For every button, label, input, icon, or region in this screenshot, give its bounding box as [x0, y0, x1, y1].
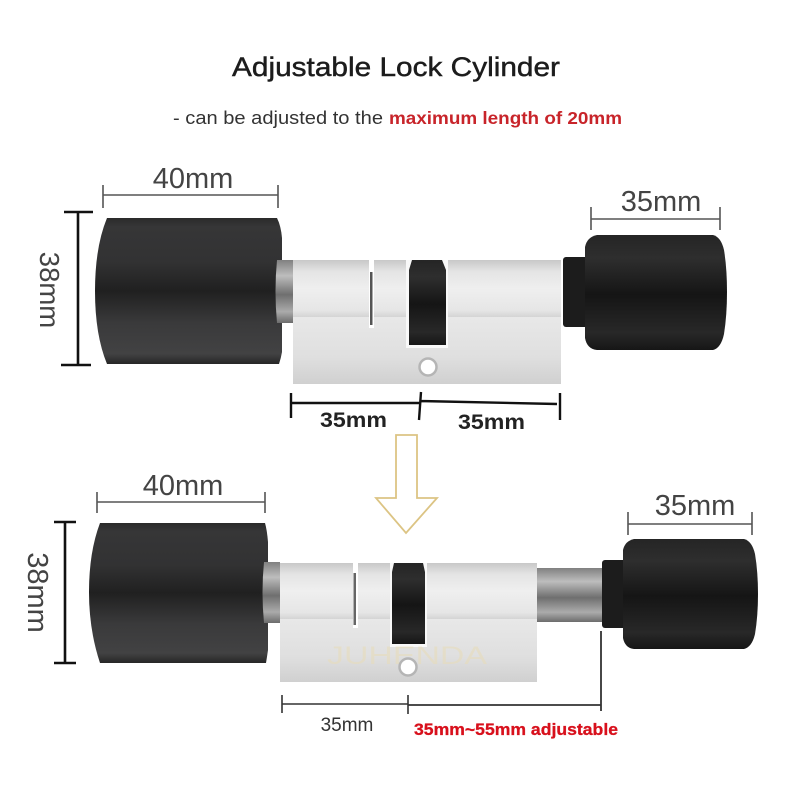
dimension: top 40mm: 40mm [153, 163, 233, 195]
top right collar [563, 257, 593, 327]
dimension: bottom 40mm: 40mm [143, 470, 223, 502]
top left knob [95, 218, 282, 364]
dimension: top body 35mm left [291, 393, 420, 432]
subtitle [173, 108, 622, 128]
dimension: top body 35mm right: 35mm [458, 411, 525, 434]
dimension: bottom 35mm knob [628, 490, 752, 535]
top lock cylinder assembly [95, 218, 727, 384]
arrow pointing down [376, 435, 437, 533]
dimension: bottom 38mm [21, 522, 76, 663]
top screw hole [420, 358, 436, 376]
title: Adjustable Lock Cylinder [232, 52, 560, 82]
bottom right knob [623, 539, 758, 649]
dimension: adjustable range: 35mm~55mm adjustable [414, 720, 618, 739]
bottom cylinder body [280, 563, 537, 682]
extended rod [537, 568, 605, 622]
dimension: top 35mm knob [591, 186, 720, 230]
dimension: top 40mm [103, 163, 278, 208]
dimension: top body 35mm right [419, 392, 560, 434]
top cylinder body [293, 260, 561, 384]
dimension: bottom body 35mm: 35mm [321, 715, 373, 736]
dimension: top 38mm: 38mm [34, 252, 65, 328]
dimension: bottom 40mm [97, 470, 265, 513]
watermark: JUHENDA [327, 642, 487, 670]
dimension: top 35mm knob: 35mm [621, 186, 701, 218]
bottom screw hole [400, 658, 416, 676]
bottom lock cylinder assembly [89, 523, 758, 682]
dimension: bottom 38mm: 38mm [21, 552, 53, 633]
bottom left knob [89, 523, 268, 663]
dimension: bottom body 35mm [282, 695, 408, 736]
dimension: adjustable range [408, 631, 618, 739]
dimension: top body 35mm left: 35mm [320, 409, 387, 432]
top left collar [276, 260, 293, 323]
bottom right collar [602, 560, 630, 628]
bottom left collar [262, 562, 280, 623]
dimension: top 38mm [34, 212, 93, 365]
dimension: bottom 35mm knob: 35mm [655, 490, 735, 522]
subtitle: - can be adjusted to the [173, 108, 383, 128]
top right knob [585, 235, 727, 350]
subtitle: maximum length of 20mm [389, 108, 622, 128]
